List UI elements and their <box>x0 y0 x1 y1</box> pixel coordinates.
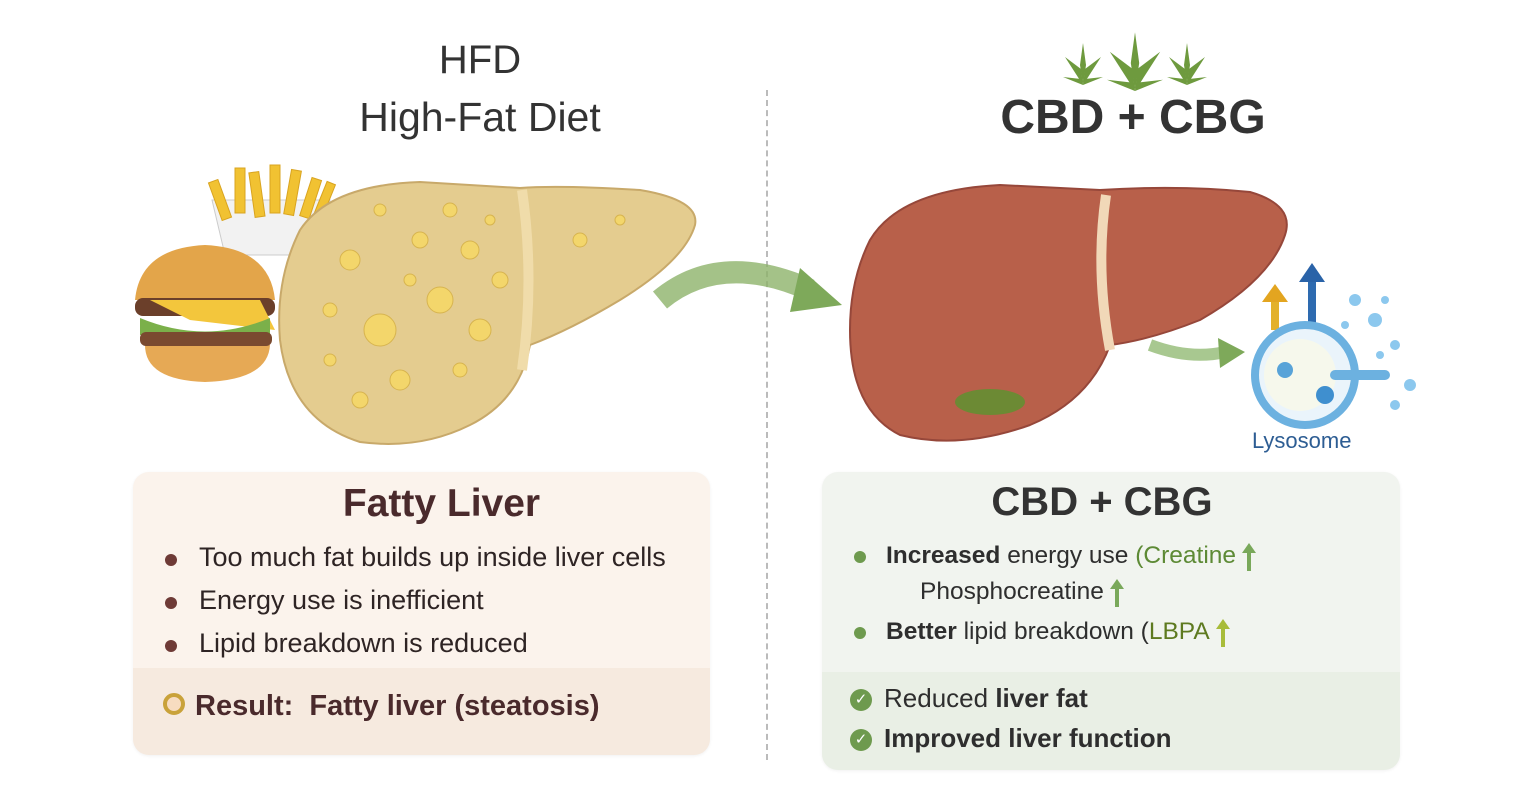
panel: fatty liver <box>133 472 710 755</box>
outcome strip <box>822 672 1400 770</box>
arrow: to lysosome <box>1150 338 1245 368</box>
list: fatty liver bullets: Lipid breakdown is reduced <box>199 628 528 658</box>
list: fatty liver bullets: Too much fat builds up inside liver cells <box>199 542 666 572</box>
result strip: Result: Fatty liver (steatosis) <box>195 690 600 722</box>
icon: lysosome <box>1255 294 1416 425</box>
icon: healthy liver <box>850 185 1287 441</box>
outcome strip: Reduced liver fat <box>884 683 1088 713</box>
heading: CBD + CBG: CBD + CBG <box>991 480 1213 524</box>
arrow: green transition <box>660 268 842 312</box>
list: CBD effects <box>854 542 1256 647</box>
title: High-Fat Diet: High-Fat Diet <box>359 94 601 140</box>
list: fatty liver bullets: Energy use is inefficient <box>199 585 484 615</box>
heading: Fatty Liver: Fatty Liver <box>343 482 540 525</box>
divider <box>766 90 768 760</box>
outcome strip: ✓ <box>855 691 867 708</box>
result strip <box>133 668 710 755</box>
title: CBD + CBG: CBD + CBG <box>1000 91 1266 144</box>
list: CBD effects: Better lipid breakdown (LBPA <box>886 618 1210 645</box>
list: CBD effects: Increased energy use (Creatine <box>886 542 1236 569</box>
outcome strip: ✓ <box>855 731 867 748</box>
label: Lysosome: Lysosome <box>1252 428 1351 453</box>
outcome strip: Improved liver function <box>884 723 1172 753</box>
arrows: up yellow and blue <box>1262 263 1325 330</box>
panel: CBD + CBG <box>822 472 1400 770</box>
icon: burger <box>135 245 275 382</box>
title: HFD: HFD <box>439 38 521 82</box>
list: CBD effects: Phosphocreatine <box>920 578 1104 605</box>
icon: cannabis leaves <box>1063 32 1207 91</box>
icon: fatty liver <box>279 182 695 444</box>
illustration: food and livers <box>135 164 1416 445</box>
list: fatty liver bullets <box>165 542 666 658</box>
icon: fries <box>208 165 335 255</box>
